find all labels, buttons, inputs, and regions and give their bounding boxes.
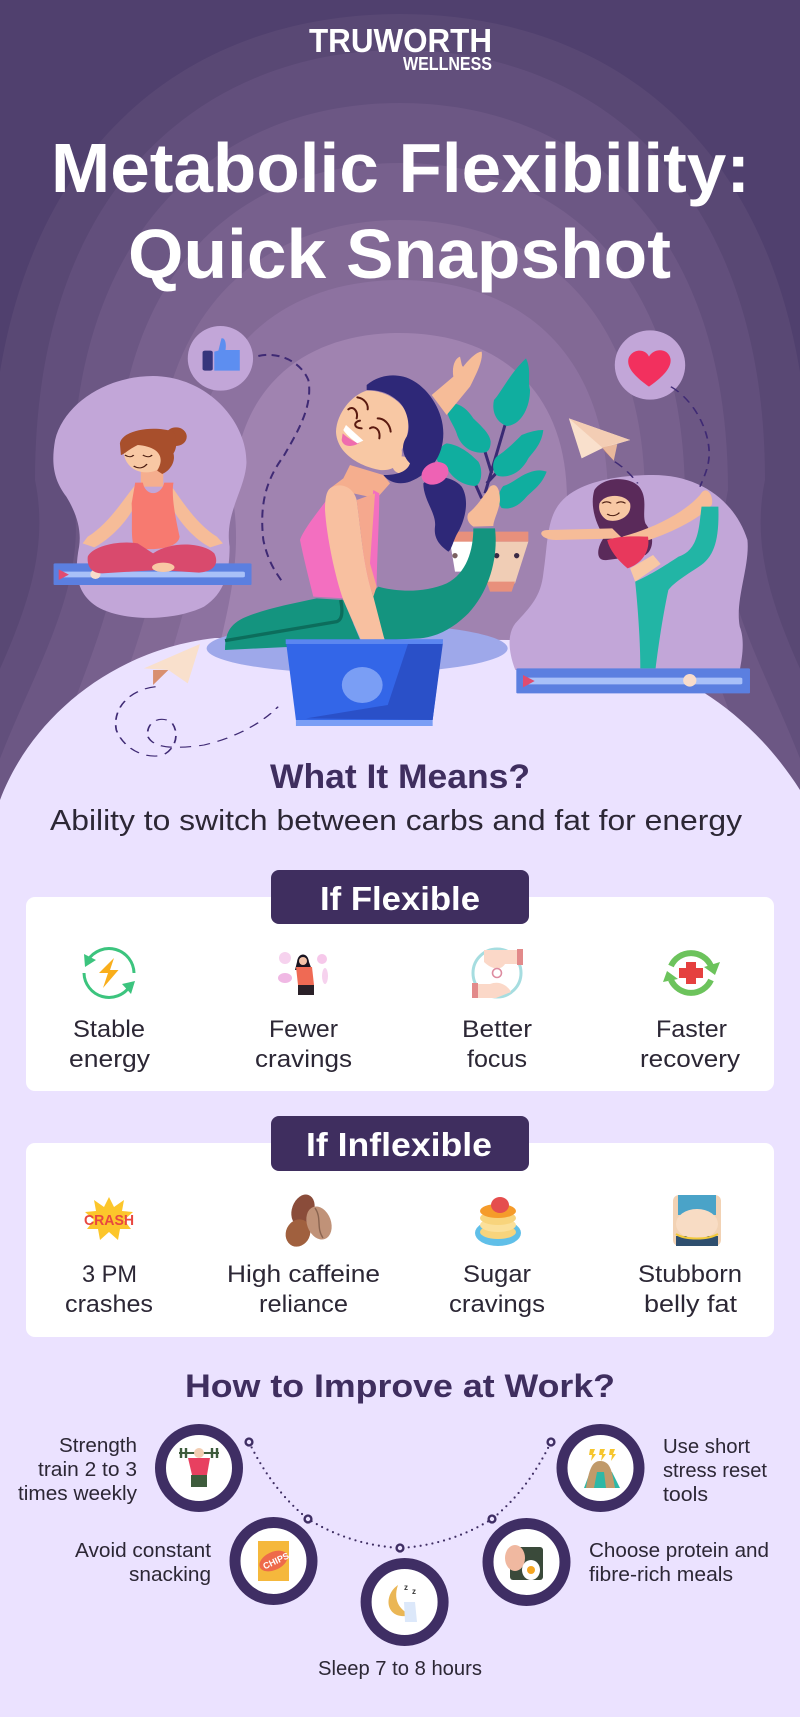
tip: avoid snacking bbox=[75, 1522, 312, 1600]
front arm bbox=[325, 485, 385, 642]
label: stress reset: tools bbox=[663, 1484, 708, 1506]
label: high caffeine reliance: reliance bbox=[259, 1291, 348, 1318]
label: stable energy bbox=[69, 1016, 150, 1073]
label: protein meals: fibre-rich meals bbox=[589, 1564, 733, 1586]
label: strength: train 2 to 3 bbox=[38, 1459, 137, 1481]
icon: stressed person bbox=[584, 1449, 620, 1488]
definition text: Ability to switch between carbs and fat for energy bbox=[50, 805, 743, 837]
heading pill: if inflexible bbox=[271, 1116, 529, 1171]
bent leg bbox=[367, 528, 496, 640]
icon: chips: CHIPS bbox=[261, 1551, 291, 1571]
label: protein meals: Choose protein and bbox=[589, 1540, 769, 1562]
dotted timeline bbox=[246, 1439, 554, 1551]
icon: moon bbox=[389, 1583, 417, 1622]
label: better focus: Better bbox=[462, 1016, 532, 1043]
label: better focus: focus bbox=[467, 1046, 527, 1073]
neck bbox=[330, 465, 390, 498]
label: stubborn belly fat: belly fat bbox=[644, 1291, 737, 1318]
panel: if flexible bbox=[26, 870, 774, 1091]
label: avoid snacking: snacking bbox=[129, 1564, 211, 1586]
lavender lower background bbox=[0, 638, 800, 1717]
heart bubble bbox=[615, 330, 685, 400]
title: Metabolic Flexibility: bbox=[51, 129, 750, 207]
logo bbox=[309, 22, 492, 74]
meditating woman bbox=[54, 427, 252, 585]
illustration: central woman bbox=[225, 352, 547, 650]
icon: better focus bbox=[472, 949, 523, 998]
pink top bbox=[300, 490, 379, 598]
kneeling thigh bbox=[225, 598, 362, 650]
heading: how to improve: How to Improve at Work? bbox=[185, 1368, 615, 1404]
label: avoid snacking bbox=[75, 1540, 211, 1586]
hair tie bbox=[418, 458, 452, 489]
label: stubborn belly fat: Stubborn bbox=[638, 1261, 742, 1288]
label: sugar cravings bbox=[449, 1261, 545, 1318]
blob behind meditating woman bbox=[53, 376, 246, 618]
label: stress reset: stress reset bbox=[663, 1460, 767, 1482]
label: avoid snacking: Avoid constant bbox=[75, 1540, 211, 1562]
icon: moon: z bbox=[412, 1587, 416, 1596]
blob behind dancer pose woman bbox=[510, 475, 748, 670]
label: stress reset: Use short bbox=[663, 1436, 750, 1458]
heading pill: if flexible bbox=[271, 870, 529, 924]
label: faster recovery: Faster bbox=[656, 1016, 727, 1043]
icon: moon: z bbox=[404, 1583, 408, 1592]
label: high caffeine reliance bbox=[227, 1261, 380, 1318]
icon: meal bbox=[505, 1545, 543, 1580]
logo: TRUWORTH bbox=[309, 22, 492, 59]
paper plane bottom bbox=[144, 644, 200, 685]
main hair bbox=[367, 375, 443, 483]
title: Quick Snapshot bbox=[128, 215, 671, 293]
icon: weightlifter bbox=[179, 1448, 219, 1487]
heading pill: if inflexible: If Inflexible bbox=[306, 1126, 492, 1163]
face bbox=[336, 391, 411, 474]
icon: faster recovery bbox=[663, 953, 720, 993]
label: stable energy: Stable bbox=[73, 1016, 145, 1043]
heading: what it means: What It Means? bbox=[270, 758, 530, 796]
icon: pancakes bbox=[475, 1197, 521, 1246]
label: sugar cravings: Sugar bbox=[463, 1261, 531, 1288]
icon: crash: CRASH bbox=[84, 1212, 134, 1229]
paper plane top bbox=[569, 418, 630, 462]
icon: coffee beans bbox=[281, 1191, 336, 1251]
label: sleep: Sleep 7 to 8 hours bbox=[318, 1658, 482, 1680]
label: 3 pm crashes bbox=[65, 1261, 153, 1318]
yoga mat bbox=[207, 623, 508, 673]
label: fewer cravings: Fewer bbox=[269, 1016, 338, 1043]
label: better focus bbox=[462, 1016, 532, 1073]
icon: belly fat bbox=[673, 1195, 721, 1246]
dancer pose woman bbox=[516, 479, 750, 693]
illustration: yoga scene side figures bbox=[53, 326, 750, 756]
label: 3 pm crashes: crashes bbox=[65, 1291, 153, 1318]
icon: chips bbox=[256, 1541, 291, 1581]
label: 3 pm crashes: 3 PM bbox=[82, 1261, 137, 1288]
icon: stable energy bbox=[84, 949, 135, 997]
icon: fewer cravings bbox=[278, 952, 328, 995]
label: strength: times weekly bbox=[18, 1483, 137, 1505]
tip: sleep bbox=[318, 1564, 482, 1680]
potted plant bbox=[437, 358, 547, 592]
label: strength: Strength bbox=[59, 1435, 137, 1457]
foot bbox=[467, 485, 500, 527]
label: stubborn belly fat bbox=[638, 1261, 742, 1318]
ponytail bbox=[423, 477, 466, 552]
title bbox=[51, 129, 750, 293]
raised arm bbox=[432, 352, 482, 415]
logo: WELLNESS bbox=[403, 54, 492, 74]
laptop bbox=[286, 639, 443, 726]
dashed line from thumb bbox=[258, 355, 309, 583]
label: high caffeine reliance: High caffeine bbox=[227, 1261, 380, 1288]
icon: crash bbox=[84, 1197, 134, 1240]
dashed flight paths bbox=[116, 387, 709, 756]
label: faster recovery bbox=[640, 1016, 740, 1073]
video bar right bbox=[516, 668, 750, 693]
tip: stress reset bbox=[562, 1430, 767, 1506]
label: stable energy: energy bbox=[69, 1046, 150, 1073]
label: strength bbox=[18, 1435, 137, 1505]
tip: strength training bbox=[18, 1430, 238, 1506]
label: faster recovery: recovery bbox=[640, 1046, 740, 1073]
heading pill: if flexible: If Flexible bbox=[320, 880, 480, 917]
hero background bbox=[0, 0, 800, 830]
label: stress reset bbox=[663, 1436, 767, 1506]
panel: if inflexible bbox=[26, 1116, 774, 1337]
mat video bar left bbox=[54, 563, 252, 585]
label: sugar cravings: cravings bbox=[449, 1291, 545, 1318]
thumbs up bubble bbox=[188, 326, 253, 391]
label: protein meals bbox=[589, 1540, 769, 1586]
label: fewer cravings: cravings bbox=[255, 1046, 352, 1073]
label: fewer cravings bbox=[255, 1016, 352, 1073]
tip: protein meals bbox=[488, 1524, 769, 1600]
